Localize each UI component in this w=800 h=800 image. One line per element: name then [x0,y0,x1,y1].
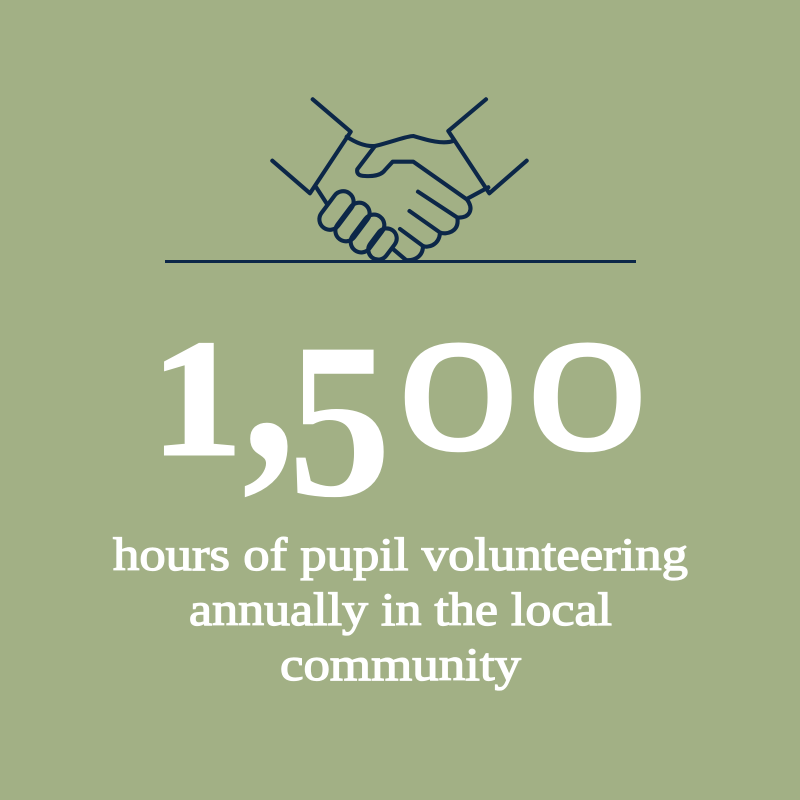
big number: 1,500: 0 [399,314,517,482]
caption text: annually in the local [189,584,612,636]
caption text: hours of pupil volunteering [113,529,688,581]
big number: 1,500: 5 [288,298,391,544]
big number: 1,500: , [242,240,296,513]
big number: 1,500: 1 [151,307,242,490]
icon: handshake [272,99,527,264]
caption text [113,529,688,691]
big number: 1,500 [151,240,646,544]
big number: 1,500: 0 [528,314,646,482]
caption text: community [280,639,522,691]
baseline rule [165,260,636,263]
